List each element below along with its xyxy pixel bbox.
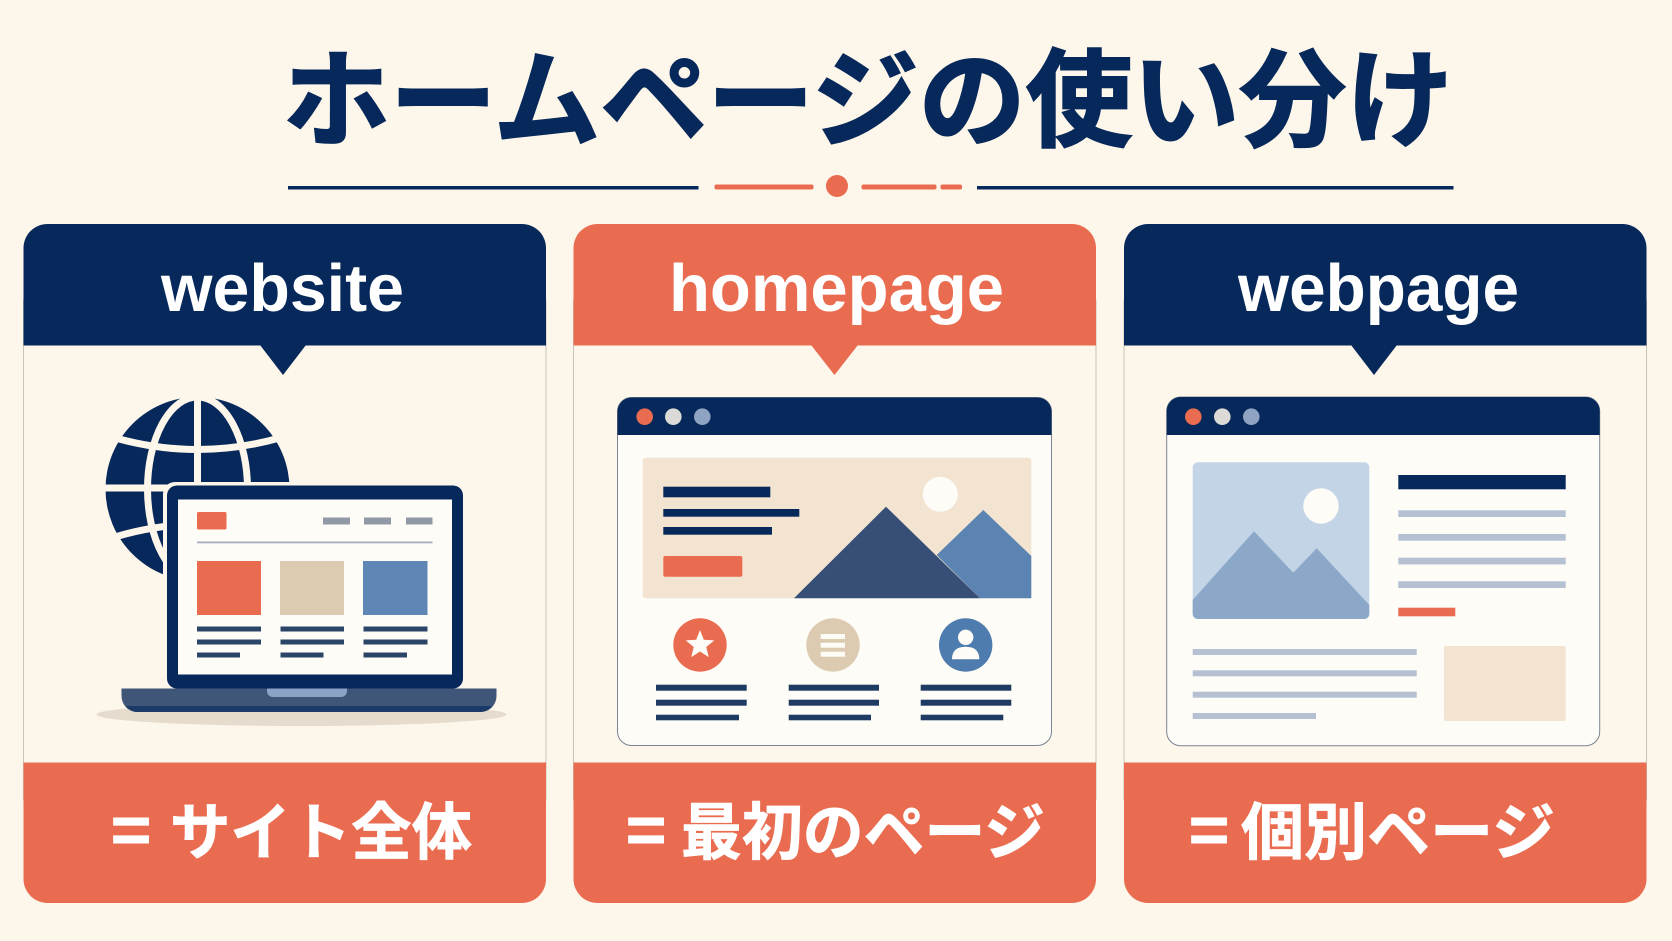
footer: homepage: [574, 762, 1096, 903]
footer: website: =: [111, 777, 151, 876]
footer: homepage: 最初のページ: [681, 782, 1045, 872]
beige box: [1444, 646, 1566, 721]
header: webpage: [1124, 224, 1646, 375]
panel: website: [24, 224, 546, 903]
header: webpage: webpage: [1237, 251, 1519, 326]
title divider: [288, 175, 1454, 197]
title: ホームページの使い分け: [283, 15, 1453, 169]
footer: website: [24, 762, 546, 903]
window title bar: [1167, 397, 1600, 435]
browser window: webpage: [1167, 397, 1600, 746]
header: homepage: homepage: [669, 251, 1004, 326]
image placeholder: [1193, 462, 1369, 619]
panel: homepage: [574, 224, 1096, 903]
footer: webpage: =: [1189, 777, 1229, 876]
browser window: homepage: [618, 398, 1052, 746]
article text: [1398, 475, 1566, 616]
illustration: globe and laptop: [96, 395, 506, 726]
window title bar: [618, 398, 1052, 435]
header: website: [24, 224, 546, 375]
lower text lines: [1193, 649, 1417, 719]
footer: webpage: [1124, 762, 1646, 903]
header: website: website: [160, 251, 404, 326]
panel: webpage: [1124, 224, 1646, 903]
footer: homepage: =: [626, 777, 666, 876]
feature: list: [789, 618, 879, 720]
icon: laptop: [96, 482, 506, 726]
footer: webpage: 個別ページ: [1241, 782, 1555, 872]
feature: star: [656, 618, 747, 720]
footer: website: サイト全体: [170, 782, 472, 872]
header: homepage: [574, 224, 1096, 375]
feature: person: [921, 618, 1011, 720]
hero banner: [643, 458, 1031, 598]
icon: globe: [100, 395, 295, 585]
